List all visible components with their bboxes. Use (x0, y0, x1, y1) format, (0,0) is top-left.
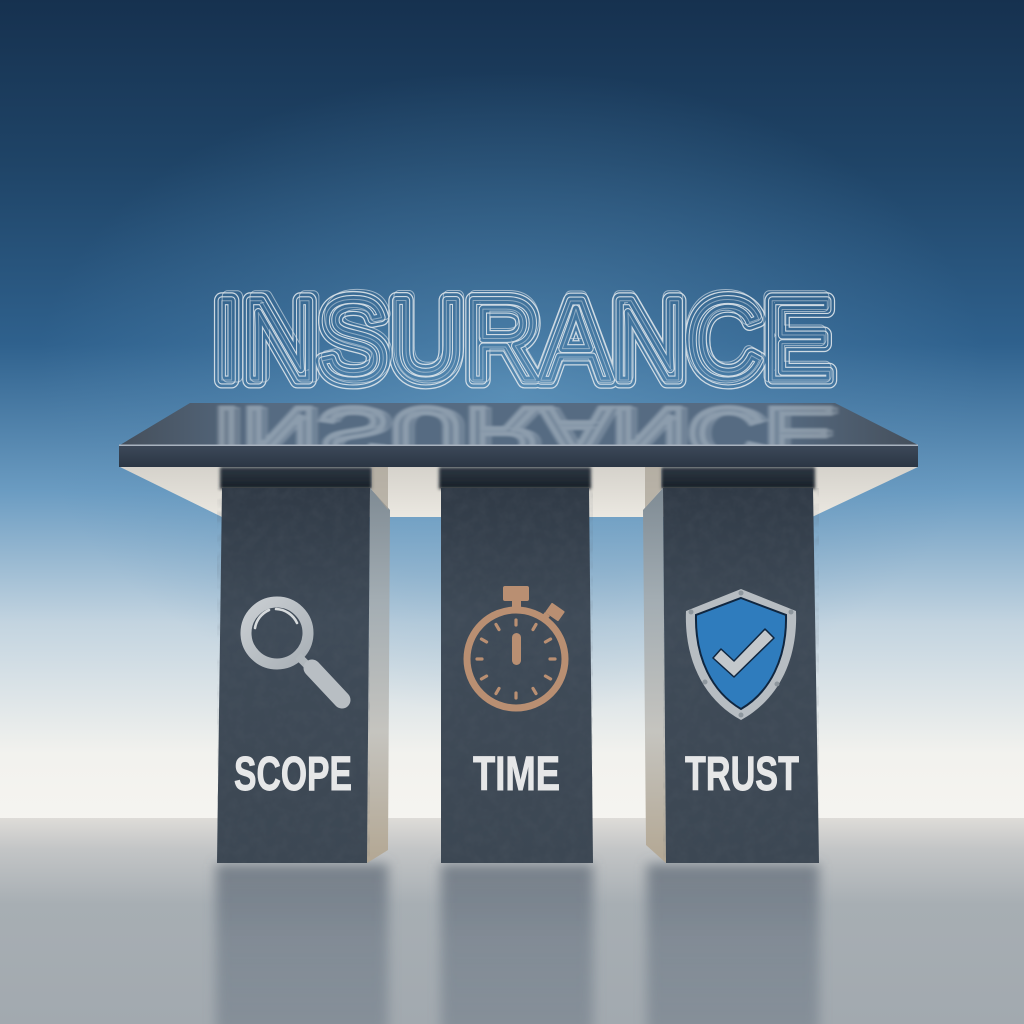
slab top surface (120, 403, 918, 445)
slab (119, 392, 918, 517)
title reflection: INSURANCE (219, 392, 841, 472)
shadow under slab (661, 467, 815, 489)
pillar side (367, 488, 390, 863)
label: time: TIME (473, 748, 560, 801)
slab front edge (119, 446, 918, 467)
icon: stopwatch (467, 586, 565, 708)
pillar: time (439, 467, 593, 863)
pillar front (663, 488, 819, 863)
shadow under slab (439, 467, 591, 489)
slab underside (120, 467, 918, 517)
icon: magnifying glass (246, 602, 342, 700)
pillar front (441, 488, 593, 863)
label: trust: TRUST (685, 748, 799, 801)
floor (0, 818, 1024, 1024)
icon: shield (686, 589, 796, 720)
pillar: scope (217, 467, 390, 863)
title reflection: INSURANCE (212, 392, 834, 472)
pillar: trust (643, 467, 819, 863)
pillar side (643, 488, 666, 863)
title: INSURANCE (212, 277, 834, 405)
label: scope: SCOPE (234, 748, 352, 801)
shadow under slab (220, 467, 372, 489)
pillar front (217, 488, 370, 863)
title reflection (216, 404, 840, 444)
